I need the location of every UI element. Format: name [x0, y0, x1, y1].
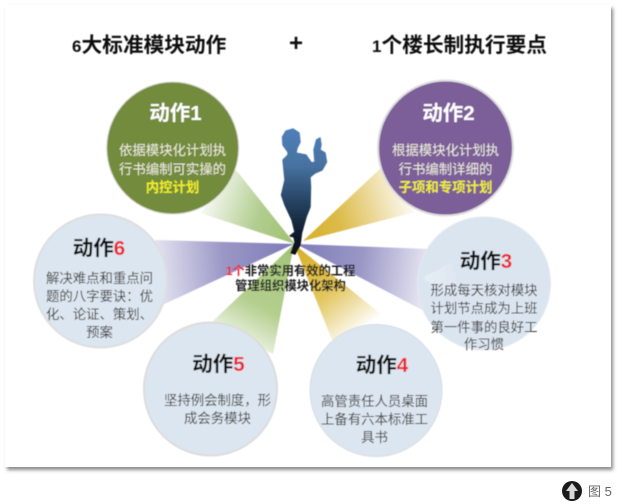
circle: action 2: 动作2 — [422, 102, 475, 125]
ray: green to action 5 — [212, 244, 294, 354]
circle: action 2: 行书编制详细的 — [399, 162, 492, 177]
heading: 1 building-lead key point: 1个楼长制执行要点 — [372, 34, 547, 57]
diagram content — [34, 30, 550, 456]
circle: action 1: 内控计划 — [146, 179, 199, 195]
circle: action 1: 行书编制可实操的 — [119, 162, 226, 177]
ray: purple to action 6 — [155, 240, 294, 306]
heading: 6 standard module actions: 6大标准模块动作 — [72, 34, 227, 57]
circle: action 6: 预案 — [86, 325, 113, 340]
circle: action 4: 上备有六本标准工 — [321, 411, 428, 427]
ray: green to action 1 — [200, 170, 295, 244]
circle: action 4: 高管责任人员桌面 — [321, 393, 428, 409]
circle: action 6: 化、论证、策划、 — [46, 306, 153, 322]
icon: up arrow badge — [562, 481, 582, 501]
circle: action 5: 动作5 — [192, 353, 245, 376]
center caption — [226, 263, 355, 293]
figure label: 图 5 — [588, 484, 612, 499]
circle: action 3: 动作3 — [460, 250, 512, 273]
circle: action 6: 题的八字要诀：优 — [46, 289, 153, 304]
circle: action 3: 形成每天核对模块 — [430, 283, 538, 298]
circle: action 5 — [144, 322, 277, 456]
circle: action 3 — [418, 217, 550, 352]
ray: purple to action 3 — [296, 244, 430, 314]
circle: action 2 — [378, 80, 513, 216]
center caption: 管理组织模块化架构 — [235, 278, 346, 293]
plus sign: + — [289, 30, 303, 57]
circle: action 4: 动作4 — [356, 354, 409, 377]
circle: action 1 — [107, 82, 239, 214]
circle: action 3: 计划节点成为上班 — [430, 301, 538, 316]
ray: gold to action 2 — [303, 168, 415, 241]
circle: action 6: 动作6 — [73, 237, 125, 260]
circle: action 4: 具书 — [361, 430, 388, 445]
circle: action 6: 解决难点和重点问 — [46, 271, 153, 286]
circle: action 6 — [34, 214, 167, 348]
figure: silhouette with thumbs up — [282, 129, 326, 254]
circle: action 5: 坚持例会制度，形 — [164, 393, 271, 408]
center caption: 1个非常实用有效的工程 — [226, 263, 355, 278]
circle: action 3: 第一件事的良好工 — [430, 319, 538, 335]
circle: action 5: 成会务模块 — [184, 411, 251, 426]
circle: action 1: 动作1 — [149, 102, 202, 125]
circle: action 3: 作习惯 — [464, 336, 504, 352]
ray: gold to action 4 — [294, 244, 382, 340]
circle: action 2: 根据模块化计划执 — [392, 143, 499, 158]
circle: action 4 — [310, 324, 442, 456]
circle: action 2: 子项和专项计划 — [399, 179, 492, 195]
circle: action 1: 依据模块化计划执 — [119, 143, 226, 158]
